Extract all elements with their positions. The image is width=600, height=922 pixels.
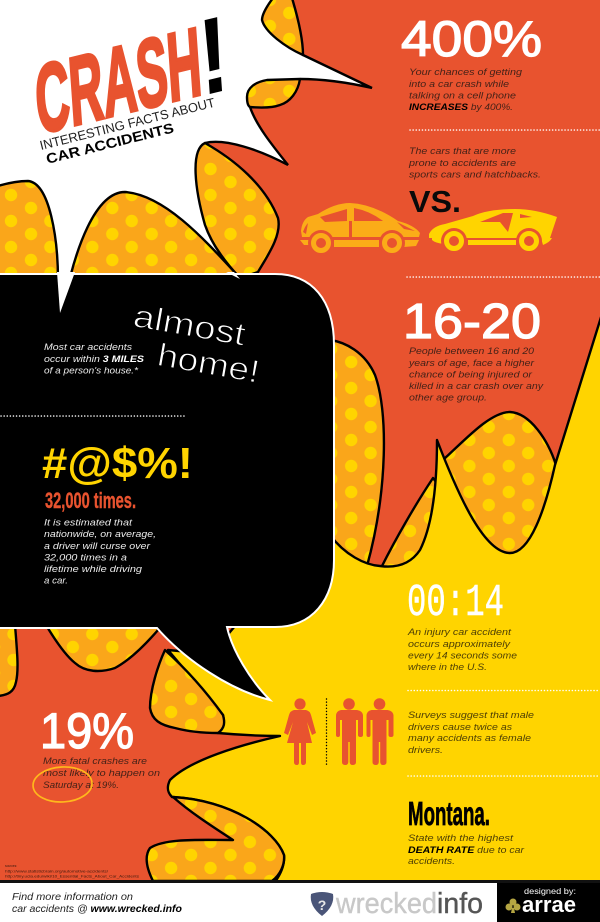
text: 3 miles fact — [44, 342, 145, 376]
text: 400% fact: Your chances of getting — [409, 67, 523, 78]
heading: almost home: almost — [131, 297, 248, 353]
dotted petal: right — [443, 412, 556, 610]
logo: wreckedinfo wordmark: wrecked — [335, 888, 437, 920]
text: Montana fact: State with the highest — [408, 833, 513, 844]
burst edge — [205, 107, 288, 165]
text: 400% fact — [409, 67, 523, 113]
text: 3 miles fact: Most car accidents — [44, 342, 132, 353]
text: age fact: years of age, face a higher — [408, 358, 535, 369]
footer text: Find more information on — [12, 892, 133, 903]
text: sports cars fact — [408, 146, 541, 180]
heading: almost home: home! — [155, 336, 262, 390]
text: male drivers fact — [408, 710, 534, 756]
dotted petal: bottom middle lobe — [46, 625, 158, 671]
text: cursing fact: a driver will curse over — [44, 541, 151, 552]
white burst — [0, 0, 372, 313]
heading: almost home — [131, 297, 262, 390]
footer text — [12, 892, 183, 915]
text: cursing fact: a car. — [44, 576, 68, 586]
credit: designed by arrae: designed by: — [524, 886, 576, 896]
dotted petal: lower centre — [150, 650, 224, 733]
icon: woman and two men — [284, 698, 394, 765]
icon: hatchback car — [300, 203, 420, 256]
text: 14 seconds fact: occurs approximately — [408, 639, 511, 650]
text: Saturday fact: Saturday at 19%. — [43, 780, 119, 791]
dotted petal: centre — [196, 143, 279, 278]
dotted petal: middle bottom — [381, 478, 450, 590]
text: 3 miles fact: of a person's house.* — [44, 366, 138, 376]
sources: http://www.statisticbrain.org/automotive-accidents/ — [5, 870, 108, 874]
text: Montana fact — [408, 833, 525, 867]
stat: 19%: 19% — [40, 703, 134, 759]
sources: http://tiny.ucla.edu/wiki/10_Essential_Facts_About_Car_Accidents — [5, 874, 140, 878]
stat: 16-20: 16-20 — [403, 295, 541, 349]
sources: sources: — [5, 864, 17, 868]
text: Saturday fact: most likely to happen on — [43, 768, 160, 779]
text: male drivers fact: many accidents as female — [408, 733, 531, 744]
sources — [5, 864, 140, 878]
circled word highlight — [32, 765, 93, 803]
heading: Montana: Montana. — [408, 795, 490, 832]
text: cursing fact: 32,000 times in a — [44, 552, 127, 564]
dotted petal: lower right — [147, 797, 284, 881]
black speech bubble — [0, 274, 334, 700]
text: 14 seconds fact: An injury car accident — [407, 627, 511, 638]
text: male drivers fact: drivers. — [408, 745, 443, 756]
logo: highway shield: ? — [318, 897, 326, 913]
text: age fact: other age group. — [409, 392, 487, 404]
stat: 400%: 400% — [401, 11, 542, 67]
text: cursing fact: It is estimated that — [44, 518, 132, 528]
footer text: car accidents @ www.wrecked.info — [12, 904, 183, 915]
text: 400% fact: INCREASES by 400%. — [409, 102, 513, 113]
footer band — [0, 880, 600, 922]
icon: sports car — [429, 209, 557, 254]
text: age fact: chance of being injured or — [409, 370, 533, 380]
credit: designed by arrae — [506, 886, 576, 917]
text: Saturday fact: More fatal crashes are — [43, 756, 147, 767]
text: 14 seconds fact: every 14 seconds some — [408, 650, 517, 662]
text: cursing fact: lifetime while driving — [44, 564, 143, 575]
subtitle: CAR ACCIDENTS — [44, 120, 175, 167]
text: cursing fact — [44, 518, 156, 586]
text: age fact: killed in a car crash over any — [409, 381, 544, 392]
logo: wreckedinfo wordmark: info — [437, 888, 483, 920]
white spikes into bubble — [57, 272, 240, 313]
dotted petal: right upper — [330, 340, 384, 590]
text: sports cars fact: sports cars and hatchbacks. — [409, 170, 541, 180]
text: Montana fact: DEATH RATE due to car — [408, 845, 525, 856]
stat: 32,000 times: 32,000 times. — [45, 488, 136, 513]
text: 400% fact: into a car crash while — [409, 79, 509, 90]
text: 3 miles fact: occur within 3 MILES — [44, 354, 145, 365]
text: sports cars fact: The cars that are more — [409, 146, 516, 157]
text: 14 seconds fact: where in the U.S. — [408, 662, 487, 673]
spike outline: top right — [300, 55, 372, 88]
dotted petal: middle left — [65, 192, 240, 300]
dotted petal: left — [0, 181, 58, 280]
subtitle: INTERESTING FACTS ABOUT — [38, 95, 216, 153]
dotted petal: bottom left lobe — [0, 625, 18, 696]
dotted petal: upper centre right — [247, 79, 300, 108]
credit: designed by arrae: arrae — [522, 892, 576, 917]
dotted petal: top right — [262, 0, 303, 55]
text: Montana fact: accidents. — [408, 856, 455, 867]
yellow burst region — [168, 314, 600, 882]
text: 14 seconds fact — [407, 627, 517, 673]
text: Saturday fact — [43, 756, 160, 791]
heading: cursing symbols: #@$%! — [42, 439, 193, 488]
text: cursing fact: nationwide, on average, — [44, 529, 156, 540]
text: age fact — [408, 346, 544, 404]
stat: 00:14: 00:14 — [407, 578, 504, 629]
logo: highway shield — [311, 892, 333, 916]
text: 400% fact: talking on a cell phone — [409, 90, 516, 102]
VS label: VS. — [409, 184, 461, 219]
text: male drivers fact: Surveys suggest that male — [408, 710, 534, 721]
text: age fact: People between 16 and 20 — [409, 346, 535, 357]
text: male drivers fact: drivers cause twice as — [408, 722, 512, 733]
text: sports cars fact: prone to accidents are — [408, 158, 516, 169]
